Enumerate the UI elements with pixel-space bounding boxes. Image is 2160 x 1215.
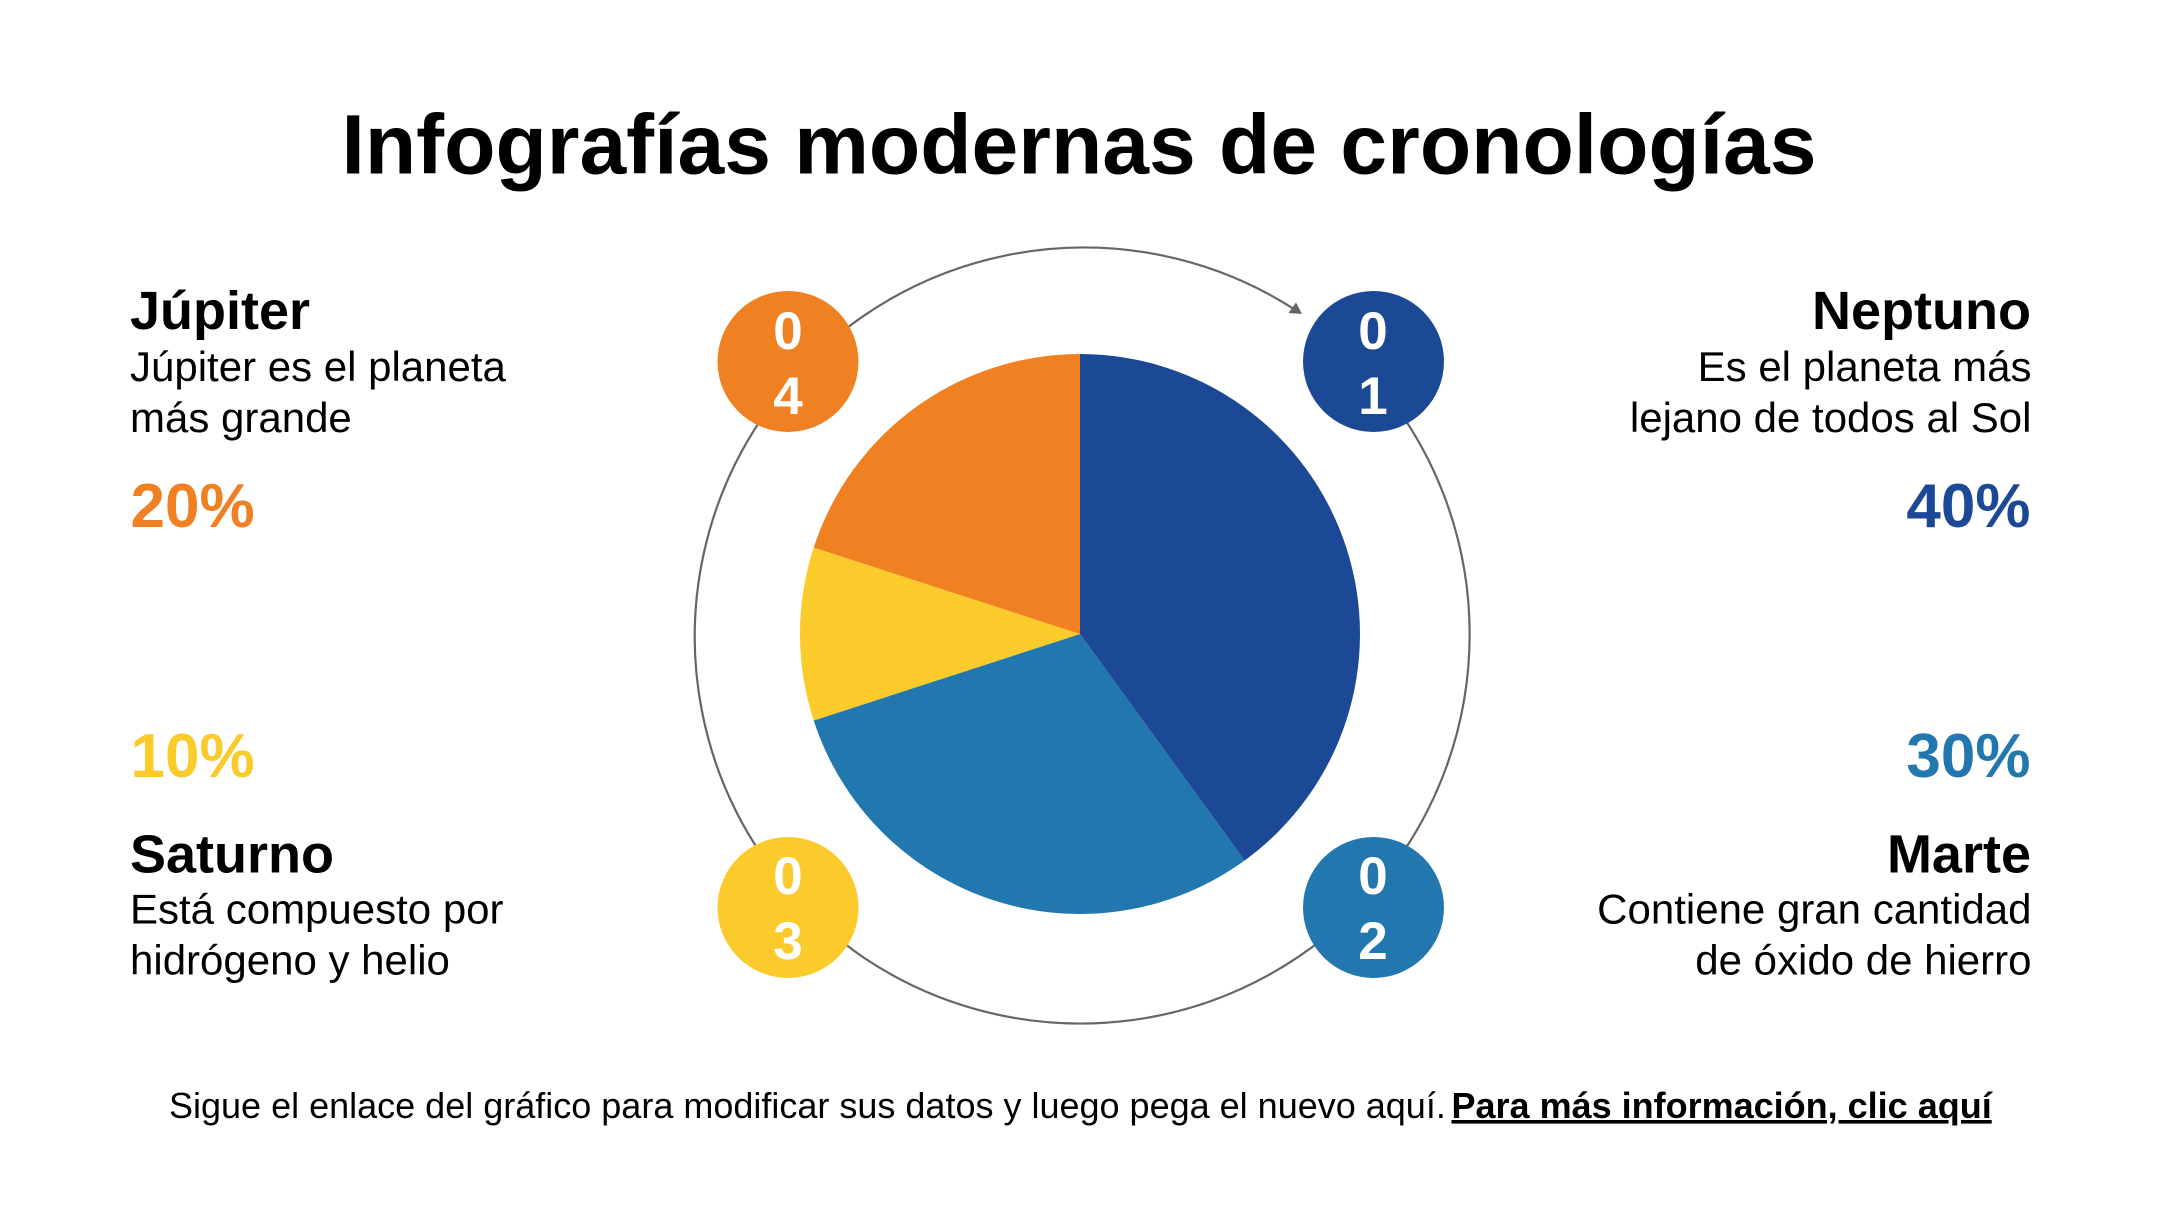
text block: Marte: de óxido de hierro	[1695, 936, 2032, 984]
value: Júpiter 20%: 20%	[130, 472, 255, 541]
badge 02: 2	[1358, 912, 1388, 971]
text block: Neptuno: Neptuno	[1812, 281, 2031, 341]
text block: Marte: Contiene gran cantidad	[1597, 886, 2032, 932]
title: Infografías modernas de cronologías	[342, 98, 1816, 192]
slice: Saturno 10%	[800, 548, 1080, 720]
slice: Júpiter 20%	[814, 354, 1080, 634]
footer note: Para más información, clic aquí	[1452, 1085, 1993, 1126]
text block: Neptuno	[1630, 281, 2032, 441]
text block: Neptuno: Es el planeta más	[1698, 343, 2032, 390]
text block: Júpiter: Júpiter	[130, 281, 310, 341]
pie chart	[800, 354, 1360, 914]
badge 04: 4	[773, 367, 803, 426]
text block: Júpiter	[130, 281, 507, 441]
text block: Marte	[1597, 824, 2032, 984]
badge 02	[1303, 837, 1444, 978]
text block: Júpiter: Júpiter es el planeta	[130, 343, 507, 390]
badge 01	[1303, 291, 1444, 432]
text block: Júpiter: más grande	[130, 394, 352, 441]
text block: Marte: Marte	[1887, 824, 2031, 884]
text block: Saturno	[130, 824, 504, 984]
badge 03: 0	[773, 847, 803, 906]
badge 01: 1	[1358, 367, 1388, 426]
cycle arrow ring	[695, 248, 1470, 1024]
footer note: Sigue el enlace del gráfico para modificar sus datos y luego pega el nuevo aquí.	[169, 1085, 1446, 1126]
badge 03: 3	[773, 912, 803, 971]
badge 04	[718, 291, 858, 432]
slice: Neptuno 40%	[1080, 354, 1360, 860]
badge 04: 0	[773, 302, 803, 361]
value: Marte 30%: 30%	[1906, 722, 2030, 791]
value: Saturno 10%: 10%	[130, 722, 255, 791]
value: Neptuno 40%: 40%	[1906, 472, 2030, 541]
text block: Saturno: Saturno	[130, 824, 334, 884]
text block: Neptuno: lejano de todos al Sol	[1630, 394, 2032, 441]
badge 02: 0	[1358, 847, 1388, 906]
badge 01: 0	[1358, 302, 1388, 361]
text block: Saturno: hidrógeno y helio	[130, 936, 450, 984]
badge 03	[718, 837, 858, 978]
text block: Saturno: Está compuesto por	[130, 886, 504, 932]
slice: Marte 30%	[814, 634, 1245, 914]
